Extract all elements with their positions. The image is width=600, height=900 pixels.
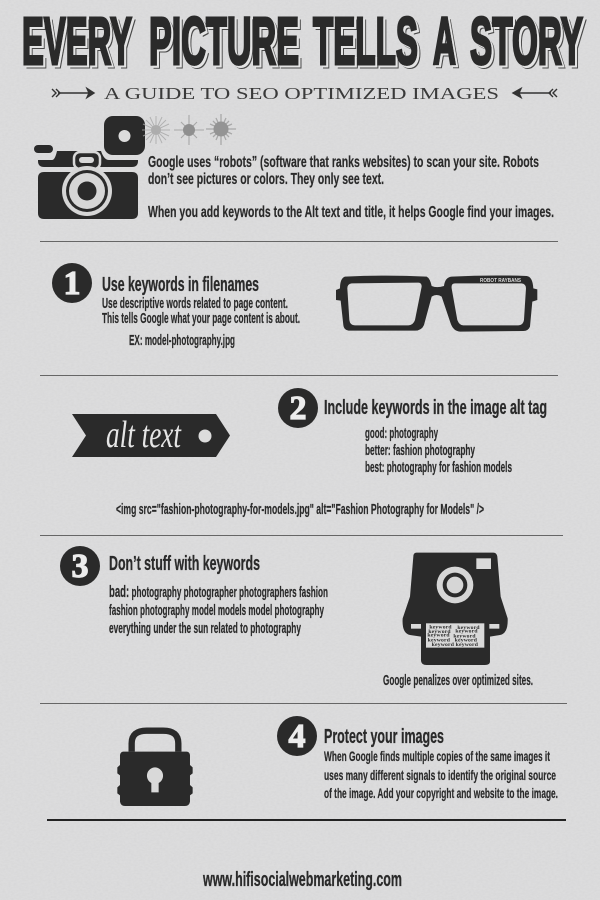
number badge 4: 4 — [288, 718, 306, 755]
step 4 body — [324, 748, 558, 801]
subtitle text: A GUIDE TO SEO OPTIMIZED IMAGES — [104, 84, 499, 103]
icon: right arrow — [513, 88, 557, 98]
panel: step 1 filenames — [52, 263, 537, 349]
title — [22, 4, 583, 79]
icon: instant camera printing keywords: keyword — [455, 638, 478, 644]
step 3 body — [109, 582, 328, 637]
step 2 examples: better: fashion photography — [365, 443, 475, 459]
intro text — [148, 154, 554, 221]
icon: instant camera printing keywords: keyword — [456, 642, 479, 648]
icon: padlock — [117, 731, 193, 806]
step 1 body — [102, 296, 300, 349]
icon: camera with flash — [34, 116, 145, 219]
number badge 1 — [52, 263, 92, 303]
panel: step 2 alt tag — [72, 388, 547, 518]
icon: instant camera printing keywords: keyword — [428, 629, 451, 635]
subtitle with arrows — [52, 84, 557, 103]
icon: three starbursts — [142, 114, 236, 145]
number badge 2 — [278, 388, 318, 428]
step 2 examples — [365, 426, 512, 476]
icon: instant camera printing keywords: keyword — [455, 629, 478, 635]
icon: instant camera printing keywords — [403, 553, 508, 665]
step 1 body: Use descriptive words related to page content. — [102, 296, 288, 312]
icon: instant camera printing keywords: keyword — [457, 625, 480, 631]
step 3 body: fashion photography model models model photography — [109, 603, 324, 619]
title: TELLS — [313, 4, 418, 79]
panel: step 4 protect images — [117, 716, 558, 806]
footer website: www.hifisocialwebmarketing.com — [202, 869, 402, 891]
icon: instant camera printing keywords: keyword — [432, 642, 455, 648]
icon: alt text tag: alt text — [106, 414, 182, 456]
heading: step 4: Protect your images — [324, 726, 444, 748]
number badge 4 — [277, 716, 317, 756]
icon: instant camera printing keywords: keyword — [428, 637, 451, 643]
intro text: don’t see pictures or colors. They only see text. — [148, 171, 384, 188]
number badge 3: 3 — [72, 548, 88, 585]
star 2 — [174, 115, 204, 145]
panel: step 3 no stuffing — [60, 546, 533, 689]
icon: instant camera printing keywords: keyword — [453, 634, 476, 640]
title: PICTURE — [149, 4, 299, 79]
heading: step 3: Don’t stuff with keywords — [109, 553, 260, 575]
step 2 examples: good: photography — [365, 426, 438, 442]
number badge 1: 1 — [64, 265, 80, 302]
step 1 body: This tells Google what your page content is about. — [102, 311, 300, 327]
icon: instant camera printing keywords: keyword — [429, 624, 452, 630]
icon: instant camera printing keywords: keyword — [427, 633, 450, 639]
icon: alt text tag — [72, 414, 230, 457]
step 1 body: EX: model-photography.jpg — [129, 333, 235, 349]
step 3 body: bad: photography photographer photographers fashion — [109, 582, 328, 601]
icon: glasses: ROBOT RAYBANS — [480, 278, 521, 284]
star 1 — [142, 116, 170, 144]
heading: step 1: Use keywords in filenames — [102, 274, 259, 296]
number badge 3 — [60, 546, 100, 586]
star 3 — [206, 114, 236, 145]
number badge 2: 2 — [290, 390, 306, 427]
icon: left arrow — [52, 88, 94, 98]
title: A — [433, 4, 456, 79]
icon: glasses — [336, 275, 537, 332]
step 3 body: everything under the sun related to photography — [109, 621, 301, 637]
title: EVERY — [22, 4, 132, 79]
